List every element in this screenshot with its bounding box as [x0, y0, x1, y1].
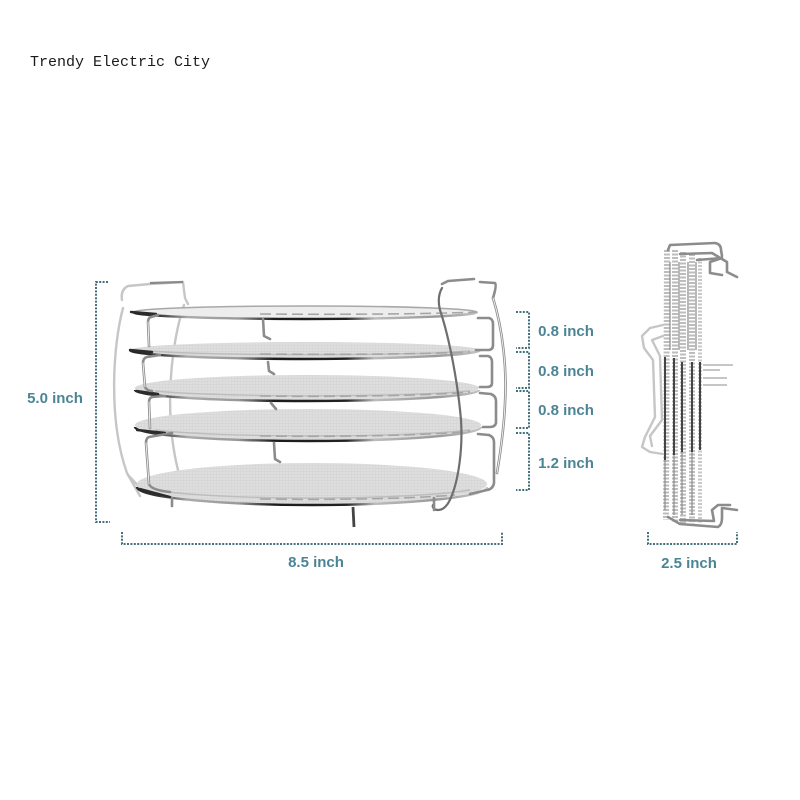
side rails	[665, 250, 700, 524]
tier 2	[130, 342, 480, 359]
tier 1	[131, 306, 477, 319]
left handle of side view	[642, 325, 663, 454]
dimension: width 8.5 inch: 8.5 inch	[288, 554, 344, 571]
dimension: tier gap 1.2 inch: 1.2 inch	[538, 455, 594, 472]
tier 5	[137, 463, 487, 505]
dimension: depth 2.5 inch: 2.5 inch	[661, 555, 717, 572]
support posts	[263, 319, 280, 462]
bottom hooks	[668, 505, 737, 527]
side view of the rack	[642, 243, 737, 527]
top hooks	[668, 243, 737, 277]
dimension: height 5.0 inch: 5.0 inch	[27, 390, 83, 407]
dimension: height 5.0 inch	[27, 282, 110, 522]
tier 4	[135, 409, 481, 441]
dimension: tier gap 0.8 inch top	[516, 312, 594, 348]
dimension: tier gap 0.8 inch middle	[516, 352, 594, 388]
dimension: tier gap 1.2 inch	[516, 433, 594, 490]
dimension: depth 2.5 inch	[648, 532, 737, 572]
right handle	[433, 279, 506, 510]
dimension: width 8.5 inch	[122, 532, 502, 571]
title: Trendy Electric City	[30, 54, 210, 71]
dimension: tier gap 0.8 inch lower: 0.8 inch	[538, 402, 594, 419]
left handle	[114, 282, 188, 496]
front view of the rack	[114, 279, 506, 527]
dimension: tier gap 0.8 inch lower	[516, 391, 594, 428]
right tier connectors	[470, 318, 496, 494]
dimension: tier gap 0.8 inch top: 0.8 inch	[538, 323, 594, 340]
left tier connectors	[143, 315, 172, 492]
feet	[172, 498, 434, 527]
right posts	[703, 365, 733, 385]
tier 3	[135, 375, 479, 401]
dimension: tier gap 0.8 inch middle: 0.8 inch	[538, 363, 594, 380]
